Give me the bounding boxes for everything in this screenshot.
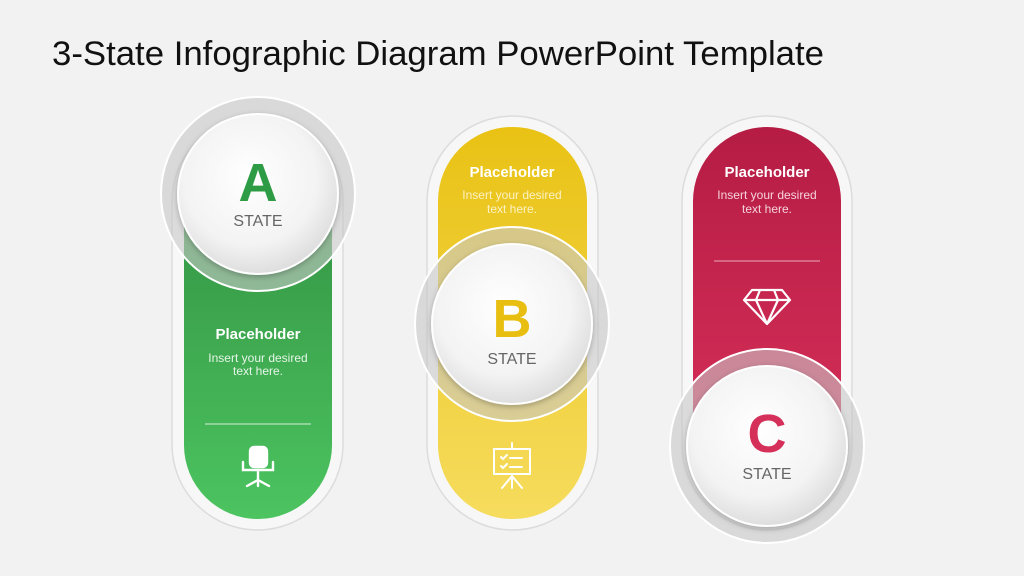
text: B placeholder — [462, 164, 562, 216]
text: C placeholder — [717, 164, 817, 216]
text: C placeholder: text here. — [742, 202, 792, 216]
circle: B: B — [492, 289, 532, 349]
circle: C: STATE — [742, 466, 792, 483]
text: C placeholder: Placeholder — [724, 164, 810, 181]
text: A placeholder — [208, 326, 308, 378]
circle: A — [161, 97, 355, 291]
text: B placeholder: text here. — [487, 202, 537, 216]
circle: A: STATE — [233, 213, 283, 230]
text: A placeholder: text here. — [233, 364, 283, 378]
circle: B — [415, 227, 609, 421]
circle: C: C — [748, 404, 786, 464]
circle: C — [670, 349, 864, 543]
text: B placeholder: Placeholder — [469, 164, 555, 181]
panel: state B — [427, 116, 598, 530]
text: A placeholder: Placeholder — [215, 326, 301, 343]
icon: office chair — [243, 447, 273, 486]
text: C placeholder: Insert your desired — [717, 188, 817, 202]
panel: state A — [172, 116, 343, 530]
circle: A: A — [238, 153, 278, 213]
text: B placeholder: Insert your desired — [462, 188, 562, 202]
icon: diamond — [744, 290, 790, 324]
title: 3-State Infographic Diagram PowerPoint Template — [52, 35, 824, 73]
circle: B: STATE — [487, 351, 537, 368]
panel: state C — [682, 116, 852, 530]
icon: presentation board — [494, 443, 530, 488]
text: A placeholder: Insert your desired — [208, 351, 308, 365]
